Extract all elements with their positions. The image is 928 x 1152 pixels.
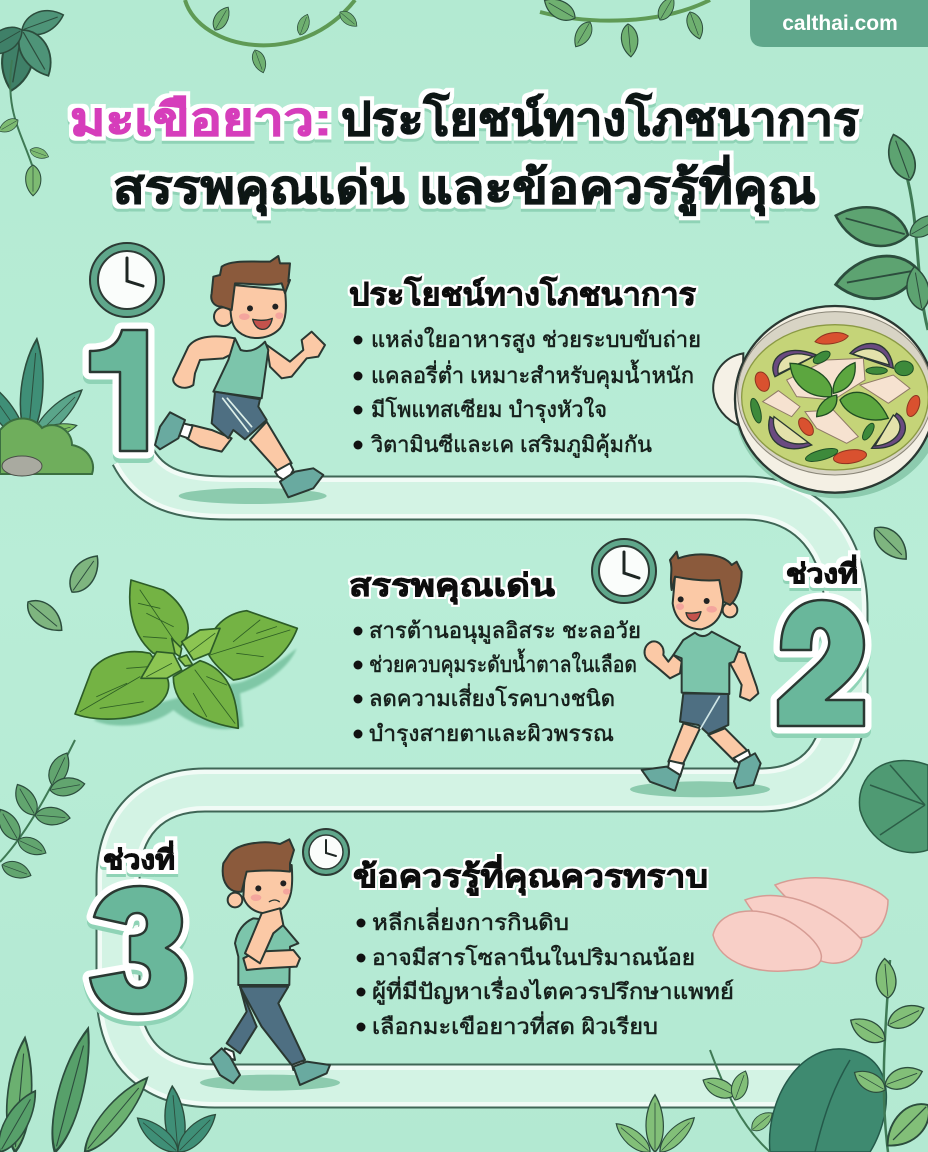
decorative foliage: monstera right xyxy=(859,761,928,853)
clock 1 xyxy=(90,243,164,317)
section 2 bullets: ลดความเสี่ยงโรคบางชนิด xyxy=(369,683,615,711)
section 3 bullets: ผู้ที่มีปัญหาเรื่องไตควรปรึกษาแพทย์ xyxy=(372,976,734,1005)
raw chicken xyxy=(713,878,888,971)
decorative foliage: left plant and rock xyxy=(0,338,93,476)
title xyxy=(70,92,859,216)
section 2 bullets: สารต้านอนุมูลอิสระ ชะลอวัย xyxy=(369,618,641,644)
section 1 heading: ประโยชน์ทางโภชนาการ xyxy=(349,276,696,312)
website badge: calthai.com xyxy=(782,12,898,35)
section 3 bullets: หลีกเลี่ยงการกินดิบ xyxy=(372,907,569,935)
title: มะเขือยาว: xyxy=(70,93,332,145)
basil garnish xyxy=(790,363,888,420)
clock 2 xyxy=(592,539,656,603)
decorative foliage: bottom right xyxy=(611,958,928,1152)
section 2 heading: สรรพคุณเด่น xyxy=(349,568,555,605)
chicken xyxy=(763,358,910,443)
green pieces xyxy=(749,349,913,464)
clock 3 xyxy=(303,829,349,875)
eggplants xyxy=(769,343,905,449)
thinking character xyxy=(200,839,340,1091)
winding path xyxy=(118,455,846,1086)
section 1 bullets: วิตามินซีและเค เสริมภูมิคุ้มกัน xyxy=(370,432,652,458)
section 1 bullets: แคลอรี่ต่ำ เหมาะสำหรับคุมน้ำหนัก xyxy=(371,360,694,389)
section 3 bullets: เลือกมะเขือยาวที่สด ผิวเรียบ xyxy=(372,1011,658,1039)
decorative foliage: scattered leaves xyxy=(21,520,914,638)
runner character xyxy=(155,256,327,504)
section 3 text xyxy=(353,854,734,1039)
section 3 bullets xyxy=(356,907,734,1039)
section 3 label: ช่วงที่ xyxy=(103,840,175,875)
number 3 xyxy=(90,886,186,1019)
decorative foliage: top right xyxy=(540,0,928,330)
title: ประโยชน์ทางโภชนาการ xyxy=(341,92,859,145)
section 2 bullets: ช่วยควบคุมระดับน้ำตาลในเลือด xyxy=(369,649,637,678)
section 2 bullets xyxy=(354,618,641,747)
section 3 bullets: อาจมีสารโซลานีนในปริมาณน้อย xyxy=(372,945,695,970)
section 1 bullets xyxy=(354,327,701,458)
section 2 bullets: บำรุงสายตาและผิวพรรณ xyxy=(369,721,614,747)
section 2 text xyxy=(349,568,641,747)
number 2 xyxy=(778,600,864,731)
walker character xyxy=(630,552,770,797)
section 1 bullets: แหล่งใยอาหารสูง ช่วยระบบขับถ่าย xyxy=(371,327,701,353)
basil leaves xyxy=(75,580,297,729)
section 1 bullets: มีโพแทสเซียม บำรุงหัวใจ xyxy=(371,397,607,423)
website badge xyxy=(750,0,928,47)
section 1 text xyxy=(349,276,701,458)
chilies xyxy=(753,333,922,466)
title: สรรพคุณเด่น และข้อควรรู้ที่คุณ xyxy=(113,155,816,216)
green curry bowl xyxy=(713,306,928,498)
decorative foliage: bottom left xyxy=(0,1026,221,1152)
decorative foliage: left branch xyxy=(0,740,86,882)
number 1 xyxy=(90,330,147,456)
section 3 heading: ข้อควรรู้ที่คุณควรทราบ xyxy=(353,854,708,896)
section 2 label: ช่วงที่ xyxy=(786,554,858,589)
decorative foliage: top left xyxy=(0,0,360,196)
